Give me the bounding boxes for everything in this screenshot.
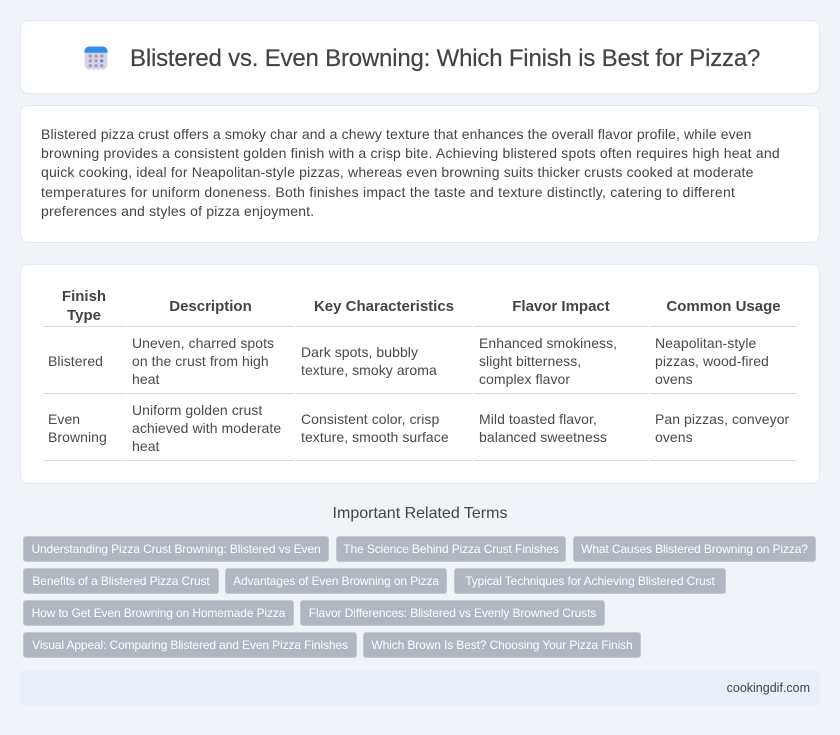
related term tags: Visual Appeal: Comparing Blistered and Even Pizza Finishes: [32, 638, 348, 652]
row: blistered: Neapolitan-style: [655, 335, 756, 351]
table header: finish type: Finish: [62, 288, 106, 305]
intro paragraph: browning provides a consistent golden finish with a crisp bite. Achieving blistered spots often requires high heat and: [41, 145, 780, 161]
related term tags: Understanding Pizza Crust Browning: Blistered vs Even: [31, 542, 321, 556]
row: even browning: achieved with moderate: [132, 420, 281, 436]
row: even browning: texture, smooth surface: [301, 429, 449, 445]
row: blistered: ovens: [655, 371, 693, 387]
footer bar: [20, 671, 820, 705]
row: blistered: pizzas, wood-fired: [655, 353, 769, 369]
row: blistered: [48, 335, 769, 387]
comparison table panel: [20, 264, 820, 484]
table header: common usage: Common Usage: [666, 298, 781, 315]
related term tags: Benefits of a Blistered Pizza Crust: [32, 574, 210, 588]
row: even browning: ovens: [655, 429, 693, 445]
related term tags: What Causes Blistered Browning on Pizza?: [581, 542, 808, 556]
row: even browning: [48, 402, 789, 454]
row: blistered: on the crust from high: [132, 353, 269, 369]
row: even browning: Consistent color, crisp: [301, 411, 439, 427]
related term tags: Typical Techniques for Achieving Blistered Crust: [465, 574, 715, 588]
row: even browning: Browning: [48, 429, 107, 445]
related term tags: How to Get Even Browning on Homemade Pizza: [32, 606, 285, 620]
footer credit: cookingdif.com: [727, 681, 810, 695]
row: even browning: Mild toasted flavor,: [479, 411, 597, 427]
table header: finish type: [62, 288, 106, 324]
intro paragraph: temperatures for uniform doneness. Both finishes impact the taste and texture distinctly, catering to different: [41, 184, 735, 200]
row: blistered: Blistered: [48, 353, 103, 369]
intro paragraph: Blistered pizza crust offers a smoky char and a chewy texture that enhances the overall flavor profile, while even: [41, 126, 752, 142]
related term tags: Advantages of Even Browning on Pizza: [233, 574, 439, 588]
related term tags: The Science Behind Pizza Crust Finishes: [343, 542, 559, 556]
row: even browning: Uniform golden crust: [132, 402, 262, 418]
intro text panel: [20, 105, 820, 243]
intro paragraph: quick cooking, ideal for Neapolitan-style pizzas, whereas even browning suits thicker crusts cooked at moderate: [41, 164, 754, 180]
row: even browning: Pan pizzas, conveyor: [655, 411, 789, 427]
related term tags: Flavor Differences: Blistered vs Evenly Browned Crusts: [309, 606, 596, 620]
table header: flavor impact: Flavor Impact: [512, 298, 610, 315]
intro paragraph: [41, 126, 780, 219]
row: blistered: Uneven, charred spots: [132, 335, 274, 351]
related term tags: [23, 536, 816, 658]
row: blistered: complex flavor: [479, 371, 570, 387]
row: blistered: slight bitterness,: [479, 353, 581, 369]
related term tags: Which Brown Is Best? Choosing Your Pizza Finish: [371, 638, 633, 652]
related terms heading: Important Related Terms: [333, 505, 507, 522]
row: even browning: balanced sweetness: [479, 429, 607, 445]
row: even browning: Even: [48, 411, 80, 427]
row: blistered: texture, smoky aroma: [301, 362, 437, 378]
intro paragraph: preferences and styles of pizza enjoyment.: [41, 203, 314, 219]
table header: key characteristics: Key Characteristics: [314, 298, 454, 315]
row: blistered: Dark spots, bubbly: [301, 344, 418, 360]
header panel: [20, 20, 820, 94]
table header: description: Description: [169, 298, 252, 315]
row: blistered: Enhanced smokiness,: [479, 335, 617, 351]
icon: calendar: [84, 46, 108, 70]
row: even browning: heat: [132, 438, 160, 454]
row: blistered: heat: [132, 371, 160, 387]
title: Blistered vs. Even Browning: Which Finish is Best for Pizza?: [130, 45, 760, 72]
table header: finish type: Type: [67, 307, 101, 324]
